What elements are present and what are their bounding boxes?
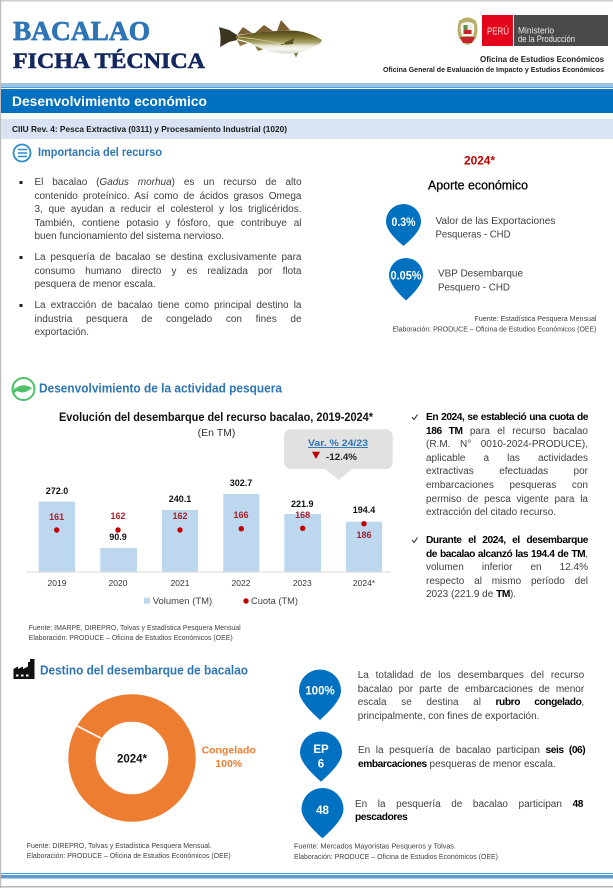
indicator: exportaciones <box>386 204 556 246</box>
office names: Oficina de Estudios Económicos <box>480 55 605 64</box>
indicator: VBP desembarque <box>389 258 523 300</box>
bar chart: desembarque: 240.1 <box>169 494 191 504</box>
bar chart: desembarque: 194.4 <box>353 505 375 515</box>
classification band: CIIU Rev. 4: Pesca Extractiva (0311) y Procesamiento Industrial (1020) <box>12 124 287 134</box>
text block: desembarque: volumen inferior en 12.4% <box>426 562 588 573</box>
chart legend: Volumen (TM) <box>153 596 212 607</box>
indicator: exportaciones: Valor de las Exportaciones <box>436 215 556 227</box>
text block: cuota: En 2024, se estableció una cuota de <box>426 412 588 423</box>
text block: cuota: (R.M. N° 0010-2024-PRODUCE), <box>426 439 588 450</box>
bar chart: desembarque: 162 <box>172 511 188 521</box>
text block: cuota: embarcaciones pesqueras con <box>426 480 588 491</box>
text block: recurso: contenido proteínico. Así como de ácidos grasos Omega <box>34 191 302 202</box>
pin: EP 6: 6 <box>318 758 324 770</box>
heading: Importancia del recurso: Importancia del recurso <box>38 145 162 159</box>
source note: aporte <box>392 316 597 334</box>
bar chart: desembarque: 2021 <box>171 578 190 588</box>
heading: Destino del desembarque de bacalao <box>14 659 248 679</box>
bar chart: desembarque: 166 <box>233 510 249 520</box>
chart title: Evolución del desembarque del recurso bacalao, 2019-2024* <box>59 410 373 424</box>
bar chart: desembarque: 168 <box>295 510 310 520</box>
bar chart: desembarque: 90.9 <box>109 532 127 542</box>
heading: Importancia del recurso <box>14 144 162 162</box>
office names: Oficina General de Evaluación de Impacto y Estudios Económicos <box>383 67 604 74</box>
bar chart: desembarque: 302.7 <box>230 478 252 488</box>
text block: pesquería <box>34 252 302 290</box>
text block: cuota: aplicable a las actividades <box>426 453 588 464</box>
pin: EP 6 <box>300 732 342 782</box>
text block: desembarque: Durante el 2024, el desembarque <box>426 535 588 546</box>
source note: chart: Elaboración: PRODUCE – Oficina de Estudios Económicos (OEE) <box>29 635 233 642</box>
indicator: VBP desembarque: VBP Desembarque <box>438 268 523 280</box>
source note: pescadores: Elaboración: PRODUCE – Oficina de Estudios Económicos (OEE) <box>294 854 498 861</box>
bar chart: desembarque <box>26 478 391 588</box>
heading: Destino del desembarque de bacalao: Destino del desembarque de bacalao <box>40 664 248 678</box>
bar chart: desembarque: 272.0 <box>46 486 68 496</box>
text block: cuota: permiso de pesca vigente para la <box>426 494 588 505</box>
text block: embarcaciones: embarcaciones pesqueras de menor escala. <box>358 759 556 770</box>
donut chart: destino: 2024* <box>117 754 148 766</box>
title <box>13 15 206 73</box>
title: FICHA TÉCNICA <box>13 48 206 73</box>
donut chart: destino: 100% <box>215 758 243 770</box>
text block: desembarque <box>426 535 588 600</box>
heading: Desenvolvimiento de la actividad pesquera: Desenvolvimiento de la actividad pesquera <box>39 382 283 396</box>
text block: desembarque: de bacalao alcanzó las 194.4 de TM, <box>426 549 588 560</box>
bar chart: desembarque: 2024* <box>353 578 376 588</box>
text block: recurso: buen funcionamiento del sistema nervioso. <box>34 231 224 242</box>
logo: Ministerio de la Producción: PERÚ <box>487 24 509 37</box>
indicator: VBP desembarque: Pesquero - CHD <box>438 282 510 294</box>
pin: 100%: 100% <box>305 686 335 698</box>
classification band <box>1 119 613 139</box>
text block: cuota: extracción del citado recurso. <box>426 507 556 518</box>
text block: desembarque: 2023 (221.9 de TM). <box>426 589 516 600</box>
text block: recurso: También, contiene potasio y fósforo, que contribuye al <box>34 218 302 229</box>
donut chart: destino <box>77 708 256 808</box>
source note: chart: Fuente: IMARPE, DIREPRO, Tolvas y Estadística Pesquera Mensual <box>29 625 241 632</box>
banner: Desenvolvimiento económico <box>1 89 613 113</box>
text block: recurso: 3, que ayudan a reducir el colesterol y los triglicéridos. <box>34 204 302 215</box>
source note: chart <box>29 625 241 642</box>
pin: EP 6: EP <box>313 744 329 756</box>
text block: extracción: industria pesquera de congelado con fines de <box>34 314 302 325</box>
logo: Ministerio de la Producción <box>458 15 608 46</box>
bar chart: desembarque: 221.9 <box>291 499 314 509</box>
source note: aporte: Fuente: Estadística Pesquera Mensual <box>474 316 597 323</box>
bar chart: desembarque: 2020 <box>109 578 128 588</box>
title: BACALAO <box>13 15 150 46</box>
text block: recurso: El bacalao (Gadus morhua) es un recurso de alto <box>34 177 302 188</box>
heading: Aporte económico: Aporte económico <box>428 178 528 192</box>
pin: 48 <box>302 788 344 838</box>
chart title: (En TM) <box>198 427 235 439</box>
heading: Desenvolvimiento de la actividad pesquera <box>12 378 283 400</box>
pin: 48: 48 <box>316 805 329 817</box>
logo: Ministerio de la Producción: Ministerio <box>518 26 554 36</box>
source note: pescadores <box>294 844 498 861</box>
text block: pescadores <box>355 798 584 823</box>
logo: Ministerio de la Producción: de la Producción <box>518 34 575 44</box>
donut chart: destino: Congelado <box>202 744 256 756</box>
text block: extracción <box>34 300 302 338</box>
text block: totalidad <box>358 670 584 722</box>
checkmarks <box>412 414 418 542</box>
chart title <box>59 410 373 439</box>
heading: 2024: 2024* <box>464 154 495 168</box>
text block: totalidad: escala se destina al rubro congelado, <box>358 697 584 708</box>
text block: totalidad: La totalidad de los desembarques del recurso <box>358 670 584 681</box>
indicator: exportaciones: 0.3% <box>392 217 416 229</box>
callout: variación: Var. % 24/23 <box>308 438 368 449</box>
text block: totalidad: bacalao por parte de embarcaciones de menor <box>358 684 584 695</box>
bar chart: desembarque: 162 <box>110 511 126 521</box>
text block: embarcaciones: En la pesquería de bacalao participan seis (06) <box>358 745 585 756</box>
bar chart: desembarque: 2022 <box>232 578 251 588</box>
source note: donut <box>27 843 231 860</box>
text block: pesquería: La pesquería de bacalao se destina exclusivamente para <box>34 252 302 263</box>
text block: cuota: extractivas efectuadas por <box>426 466 588 477</box>
bar chart: desembarque: 2023 <box>293 578 312 588</box>
text block: pescadores: pescadores <box>355 812 407 823</box>
text block: cuota: 186 TM para el recurso bacalao <box>426 426 588 437</box>
callout: variación: -12.4% <box>326 452 358 463</box>
pin: 100% <box>299 670 341 720</box>
bar chart: desembarque: 186 <box>356 530 372 540</box>
text block: pescadores: En la pesquería de bacalao participan 48 <box>355 798 583 810</box>
banner: Desenvolvimiento económico: Desenvolvimiento económico <box>12 93 207 109</box>
indicator: exportaciones: Pesqueras - CHD <box>436 228 511 240</box>
callout: variación <box>284 429 393 480</box>
text block: pesquería: consumo humano directo y es realizada por flota <box>34 266 302 277</box>
text block: extracción: La extracción de bacalao tiene como principal destino la <box>34 300 302 311</box>
icon: cod fish <box>219 20 322 58</box>
text block: desembarque: respecto al mismo período del <box>426 576 588 587</box>
office names <box>383 55 605 74</box>
bar chart: desembarque: 161 <box>49 512 64 522</box>
source note: aporte: Elaboración: PRODUCE – Oficina de Estudios Económicos (OEE) <box>392 326 596 334</box>
indicator: VBP desembarque: 0.05% <box>390 270 422 282</box>
text block: totalidad: principalmente, con fines de exportación. <box>358 711 539 722</box>
text block: pesquería: pesquera de menor escala. <box>34 279 156 290</box>
text block: embarcaciones <box>358 745 586 770</box>
bullets: importancia <box>20 181 22 307</box>
chart legend <box>144 596 298 607</box>
chart legend: Cuota (TM) <box>251 596 298 607</box>
source note: pescadores: Fuente: Mercados Mayoristas Pesqueros y Tolvas. <box>294 844 456 850</box>
source note: donut: Fuente: DIREPRO, Tolvas y Estadística Pesquera Mensual. <box>27 843 212 850</box>
text block: recurso <box>34 177 302 242</box>
bar chart: desembarque: 2019 <box>48 578 67 588</box>
source note: donut: Elaboración: PRODUCE – Oficina de Estudios Económicos (OEE) <box>27 853 231 860</box>
text block: cuota <box>426 412 588 518</box>
text block: extracción: exportación. <box>34 327 89 338</box>
